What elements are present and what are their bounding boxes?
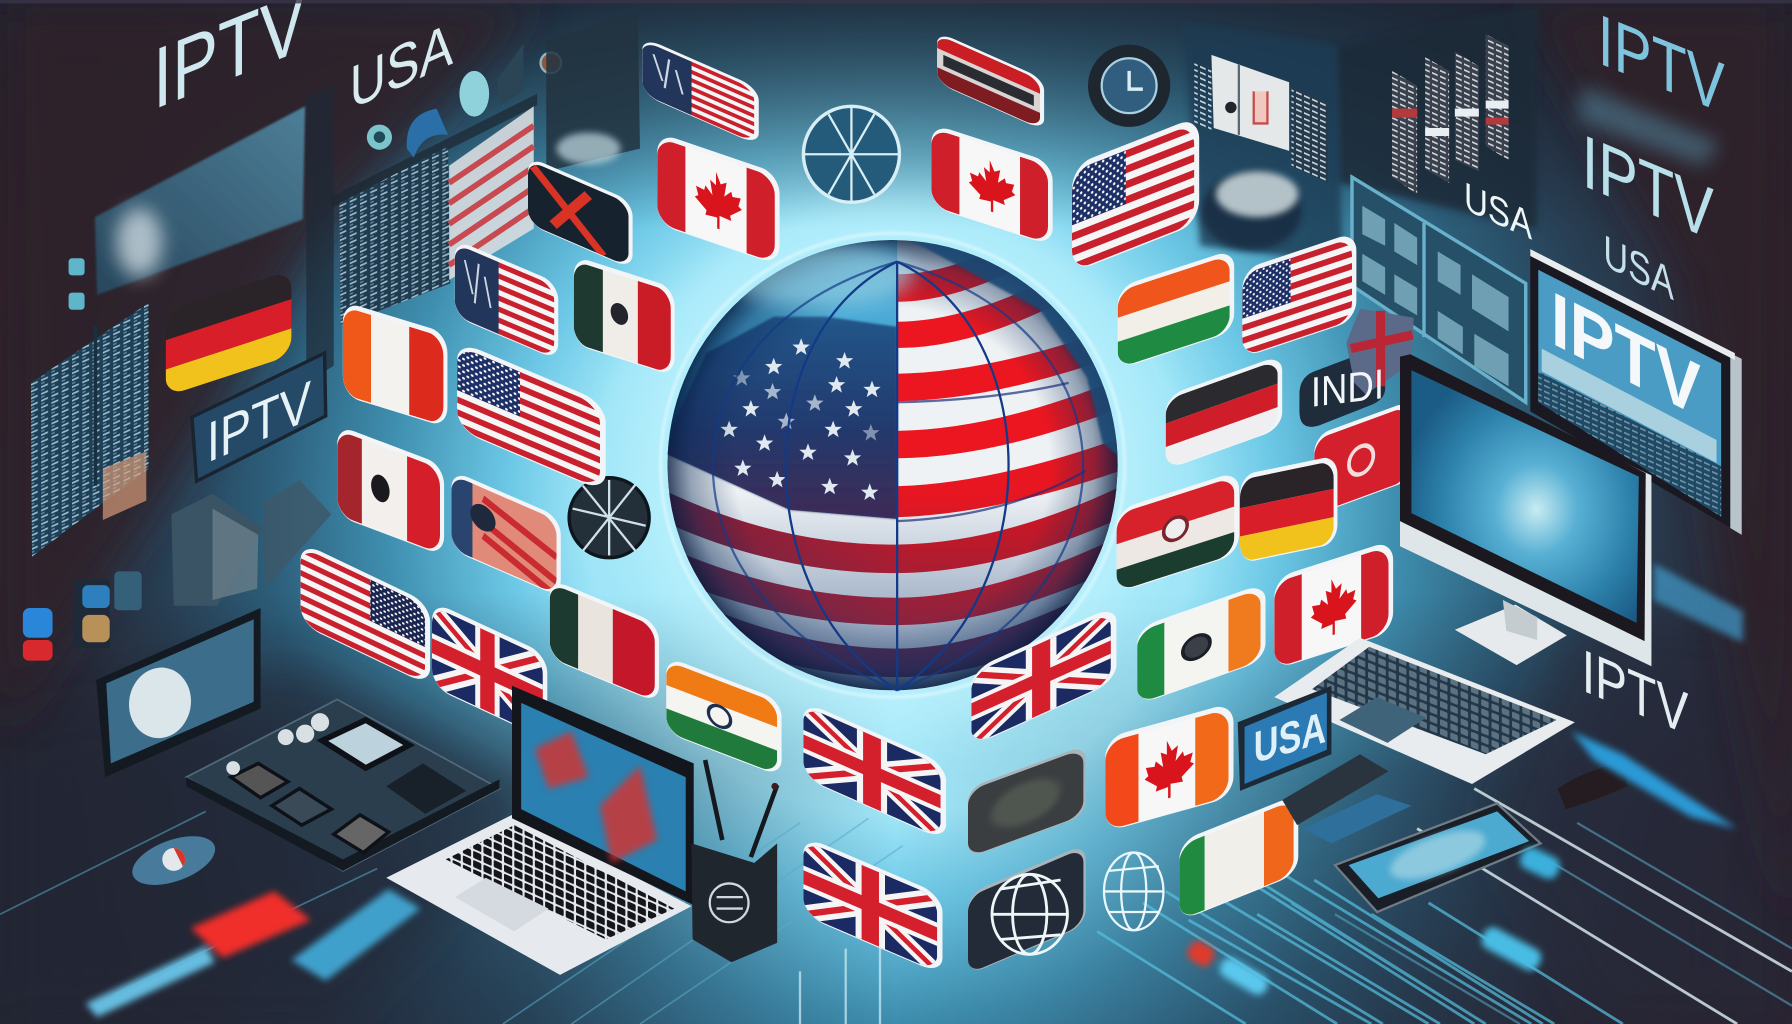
flag: India horizontal [1118,249,1234,369]
laptop left [386,686,694,975]
flag: Canada lower right [1274,540,1393,670]
flag: red cross dark [528,156,633,269]
panel: small code blocks [1194,63,1328,183]
flag: India lower [666,657,782,777]
label USA right outer: USA [1603,224,1674,310]
flag: USA mirrored [301,542,430,686]
panel: faded USA stripes [449,106,534,280]
USA tablet: USA [1254,701,1326,773]
flag: USA right [1242,232,1356,358]
panel: channel grid [1352,177,1526,402]
flag: Italy style [550,579,659,703]
right wall panels [1183,5,1720,402]
flag: USA wide [457,340,606,493]
flag: German pale [1166,354,1282,470]
flag: India red top [1117,471,1239,593]
data streak lines [0,789,1792,1024]
icons row [367,43,561,158]
flag: Germany [1240,455,1337,564]
panel: dark photo tile [968,745,1086,858]
small app icons [23,571,142,661]
IPTV label panel [192,353,326,481]
INDIA label [1299,309,1414,427]
blurred glass object [1201,171,1302,250]
label USA top left: USA [350,10,453,123]
label IPTV right middle: IPTV [1582,118,1714,257]
flag: USA top [642,37,759,145]
dark wall column [306,86,537,383]
flag: Ireland [1179,794,1298,921]
label IPTV top right: IPTV [1598,0,1725,130]
rack columns [1392,34,1509,194]
blurred lower reflection [1654,563,1743,642]
globe glow [630,203,1155,729]
flag: UK lower center [803,701,946,841]
blurred banner top right [1577,86,1720,166]
flag: USA upper right [1072,116,1199,273]
monitor small left [96,608,261,777]
circular wheel icon [569,478,649,558]
red channel badge [937,32,1044,131]
globe icon top [803,106,899,202]
flag: UK left [432,601,547,740]
flags left cluster [301,37,946,975]
boxes left [171,480,331,606]
label IPTV lower right: IPTV [1582,636,1689,748]
icon tile: globe [968,844,1086,975]
panel: code columns far left [31,303,149,557]
flag: orange white red [343,301,447,428]
small peripherals [1282,754,1627,843]
tablet device [1335,803,1541,912]
left wall panels [23,11,640,661]
icon: globe outline [1104,853,1163,930]
main monitor [1400,354,1651,666]
blurred light bars [86,731,1737,1017]
flag: Canada top left [657,132,780,266]
wall text labels [153,0,1725,748]
IPTV label panel: IPTV [207,369,311,475]
flag: Canada orange [1105,702,1234,832]
INDIA label: INDI [1311,361,1384,416]
panel: blurred video screen [95,106,305,295]
dark rack wall [1183,5,1537,263]
globe [657,234,1131,703]
flag: USA emblem [451,470,561,598]
keyboard laptop right [1274,638,1575,784]
flags right cluster [666,116,1414,975]
panel: code block center left [339,146,450,326]
top edge strip [0,0,1792,3]
flag: India vertical [1137,583,1266,705]
router with antennas [691,760,778,962]
flag: UK bottom center [803,836,942,975]
back monitor IPTV: IPTV [1551,275,1701,434]
German flag panel [166,270,291,396]
server box top [546,11,640,171]
flag: red white with emblem [337,425,444,556]
circuit board [186,699,499,871]
small side icons [69,258,85,310]
label USA right inner: USA [1464,175,1533,249]
clock icon [1088,45,1170,127]
round badge [126,826,222,895]
flag: Canada top right [931,124,1053,246]
flag: UK right [971,605,1116,747]
flag: red with emblem [1314,404,1400,507]
flag: USA dark left [455,239,558,360]
flag: Mexico [574,256,675,376]
back monitor IPTV [1530,249,1742,535]
panel: white video tiles [1211,55,1289,151]
USA tablet [1238,686,1331,791]
